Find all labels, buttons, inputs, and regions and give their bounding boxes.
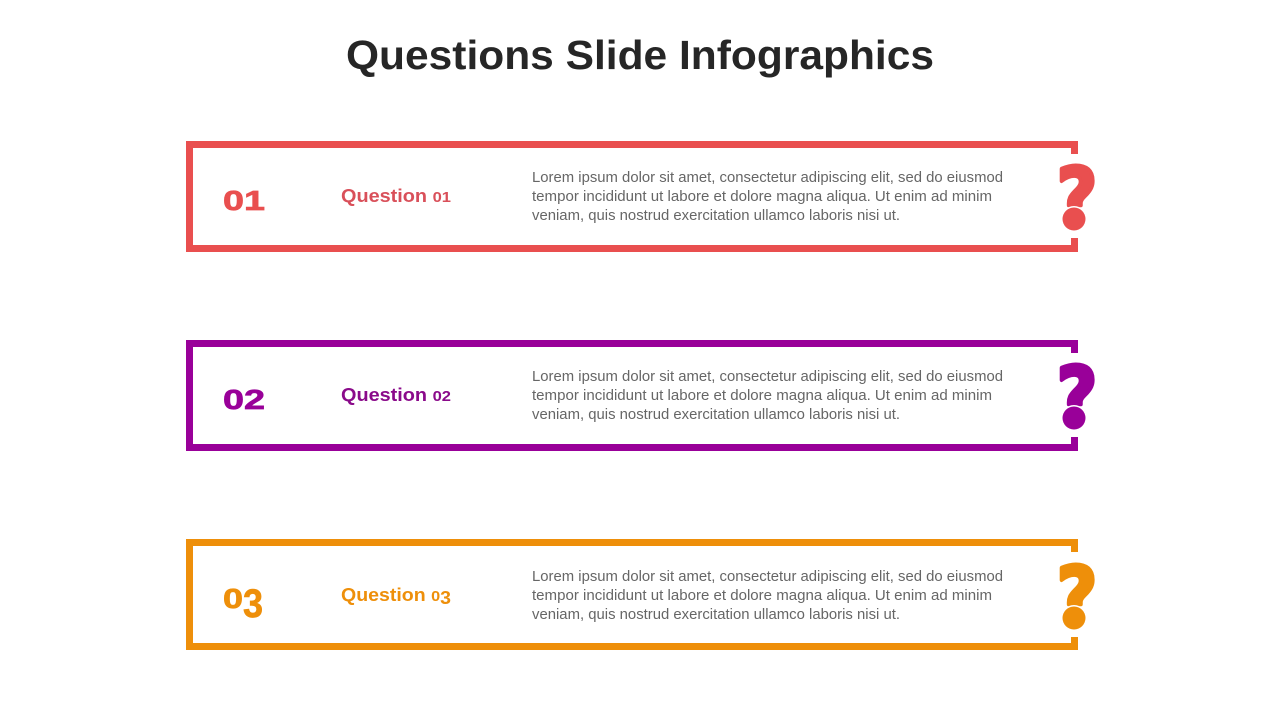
description 03: tempor incididunt ut labore et dolore magna aliqua. Ut enim ad minim xyxy=(532,588,992,604)
panel: question 01 xyxy=(190,144,1097,248)
title: Questions Slide Infographics xyxy=(346,32,934,78)
description 02: tempor incididunt ut labore et dolore magna aliqua. Ut enim ad minim xyxy=(532,388,992,404)
description 03 xyxy=(532,569,1003,623)
panel: question 02 xyxy=(190,344,1097,448)
number 03: 0 xyxy=(223,583,243,614)
icon: question mark 01: ? xyxy=(1057,151,1097,244)
frame 02 xyxy=(190,344,1074,448)
heading 02: Question 02 xyxy=(341,385,451,405)
frame 01 xyxy=(190,144,1074,248)
heading 03: 3 xyxy=(440,588,451,608)
description 01: Lorem ipsum dolor sit amet, consectetur adipiscing elit, sed do eiusmod xyxy=(532,170,1003,186)
icon: question mark 03: ? xyxy=(1057,550,1097,643)
description 01 xyxy=(532,170,1003,224)
description 02: veniam, quis nostrud exercitation ullamco laboris nisi ut. xyxy=(532,407,900,423)
description 02 xyxy=(532,369,1003,423)
description 03: veniam, quis nostrud exercitation ullamco laboris nisi ut. xyxy=(532,607,900,623)
heading 03: Question 0 xyxy=(341,585,439,605)
description 01: veniam, quis nostrud exercitation ullamco laboris nisi ut. xyxy=(532,208,900,224)
frame 03 xyxy=(190,542,1074,646)
panel: question 03 xyxy=(190,542,1097,646)
heading 01: Question 01 xyxy=(341,186,451,206)
number 02: 02 xyxy=(223,384,265,415)
description 03: Lorem ipsum dolor sit amet, consectetur adipiscing elit, sed do eiusmod xyxy=(532,569,1003,585)
description 01: tempor incididunt ut labore et dolore magna aliqua. Ut enim ad minim xyxy=(532,189,992,205)
number 03 xyxy=(223,582,263,626)
number 01: 01 xyxy=(223,185,265,216)
description 02: Lorem ipsum dolor sit amet, consectetur adipiscing elit, sed do eiusmod xyxy=(532,369,1003,385)
icon: question mark 02: ? xyxy=(1057,350,1097,443)
number 03: 3 xyxy=(243,582,263,626)
